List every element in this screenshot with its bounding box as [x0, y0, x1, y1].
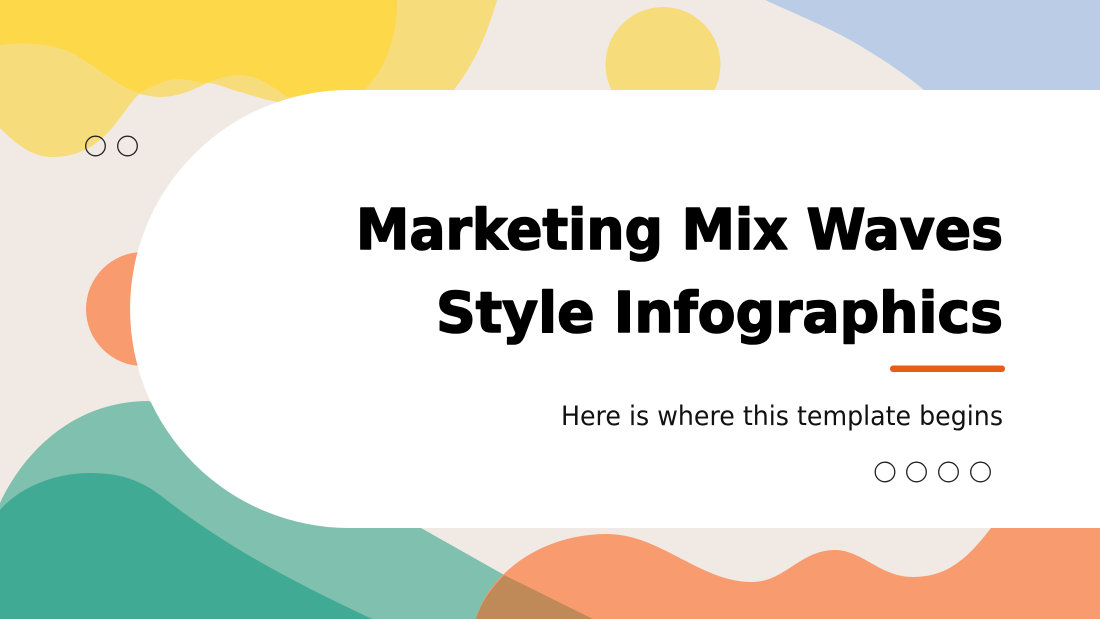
- orange wave bottom: [476, 528, 1100, 619]
- dark teal wave: [0, 473, 372, 619]
- title: Style Infographics: [436, 281, 1003, 346]
- overlap of teal and orange: [476, 575, 593, 619]
- light teal wave: [0, 401, 593, 619]
- title: Marketing Mix Waves: [356, 198, 1003, 263]
- small circles bottom right: [875, 462, 990, 482]
- blue shape top right: [765, 0, 1100, 91]
- subtitle: Here is where this template begins: [561, 401, 1003, 432]
- light yellow circle: [606, 7, 720, 122]
- orange divider: [890, 366, 1005, 372]
- small circles top left: [86, 136, 137, 156]
- white rounded panel: [130, 90, 1100, 528]
- dark yellow wave: [0, 0, 397, 97]
- light yellow wave: [0, 0, 497, 157]
- orange circle left: [86, 252, 200, 366]
- title: [356, 198, 1003, 346]
